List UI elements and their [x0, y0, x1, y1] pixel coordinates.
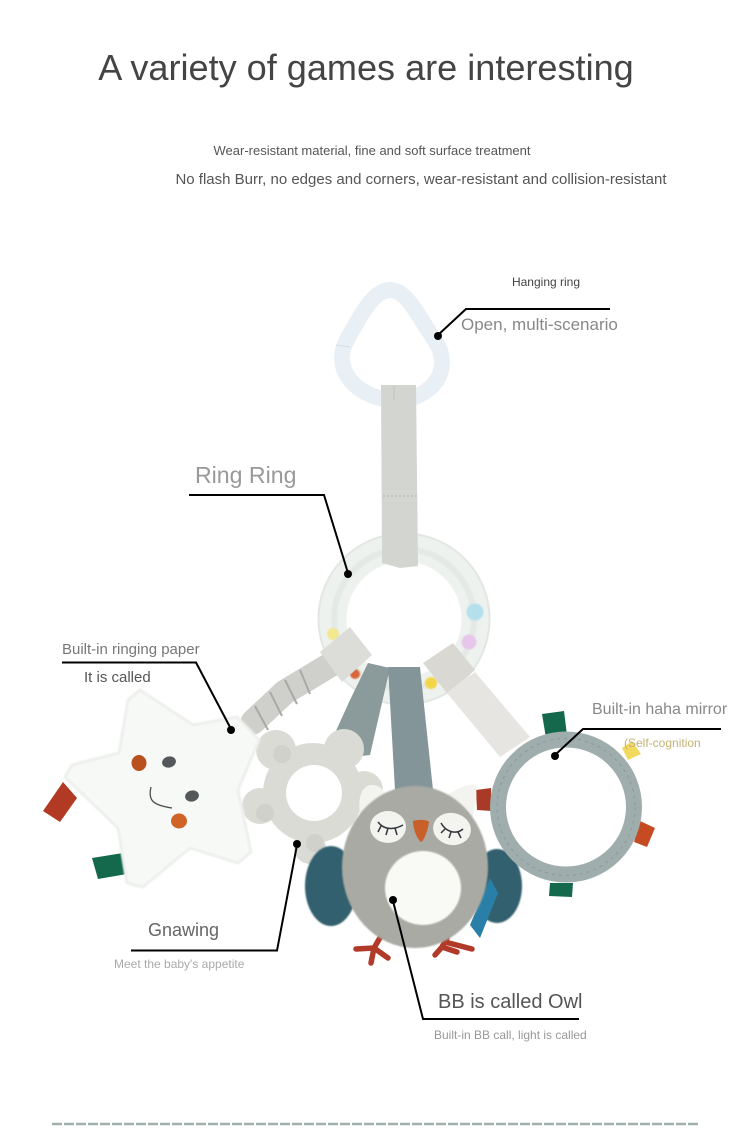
- callout: ring ring: Ring Ring: [195, 462, 296, 488]
- subtitle line 2: No flash Burr, no edges and corners, wear-resistant and collision-resistant: [175, 171, 667, 188]
- clear rattle ring: [318, 534, 490, 704]
- callout: built-in haha mirror: (Self-cognition: [624, 736, 701, 750]
- product: baby hanging toy: [43, 290, 655, 963]
- dark straps to teether and owl: [335, 663, 433, 790]
- subtitle line 1: Wear-resistant material, fine and soft surface treatment: [214, 143, 531, 158]
- owl ears: [359, 785, 388, 815]
- callout: built-in ringing paper: [62, 641, 235, 734]
- callout: hanging ring: Hanging ring: [512, 275, 580, 289]
- callout: ring ring: [189, 462, 352, 578]
- callout: BB is called owl: Built-in BB call, light is called: [434, 1028, 587, 1042]
- hanging ring: [336, 290, 442, 400]
- star tags: [43, 782, 127, 879]
- teether: [242, 729, 383, 864]
- owl eyes: [370, 811, 406, 843]
- callout: built-in ringing paper: Built-in ringing paper: [62, 641, 200, 658]
- callout: gnawing: [114, 840, 301, 971]
- callout: hanging ring: [434, 275, 618, 340]
- callout: BB is called owl: BB is called Owl: [438, 991, 582, 1013]
- owl feet: [356, 936, 472, 963]
- owl wings: [305, 846, 522, 938]
- owl beak: [413, 820, 429, 842]
- callout: BB is called owl: [389, 896, 587, 1042]
- plush owl: [342, 785, 488, 948]
- callout: hanging ring: Open, multi-scenario: [461, 315, 618, 334]
- light strap to mirror: [423, 643, 530, 757]
- owl body: [342, 786, 488, 948]
- callout: gnawing: Meet the baby's appetite: [114, 957, 245, 971]
- callout: built-in ringing paper: It is called: [84, 669, 151, 686]
- rattle beads: [466, 604, 484, 620]
- title: A variety of games are interesting: [98, 47, 634, 88]
- callout: built-in haha mirror: [551, 701, 728, 760]
- plush star with face: [65, 690, 259, 887]
- callout: gnawing: Gnawing: [148, 920, 219, 940]
- mirror tags: [476, 711, 655, 897]
- upper grey strap: [381, 385, 418, 568]
- callout: built-in haha mirror: Built-in haha mirror: [592, 701, 728, 718]
- mirror ring: [497, 738, 635, 876]
- dashed divider: [52, 1123, 699, 1125]
- elastic strap to star: [253, 627, 372, 730]
- owl belly: [385, 851, 461, 925]
